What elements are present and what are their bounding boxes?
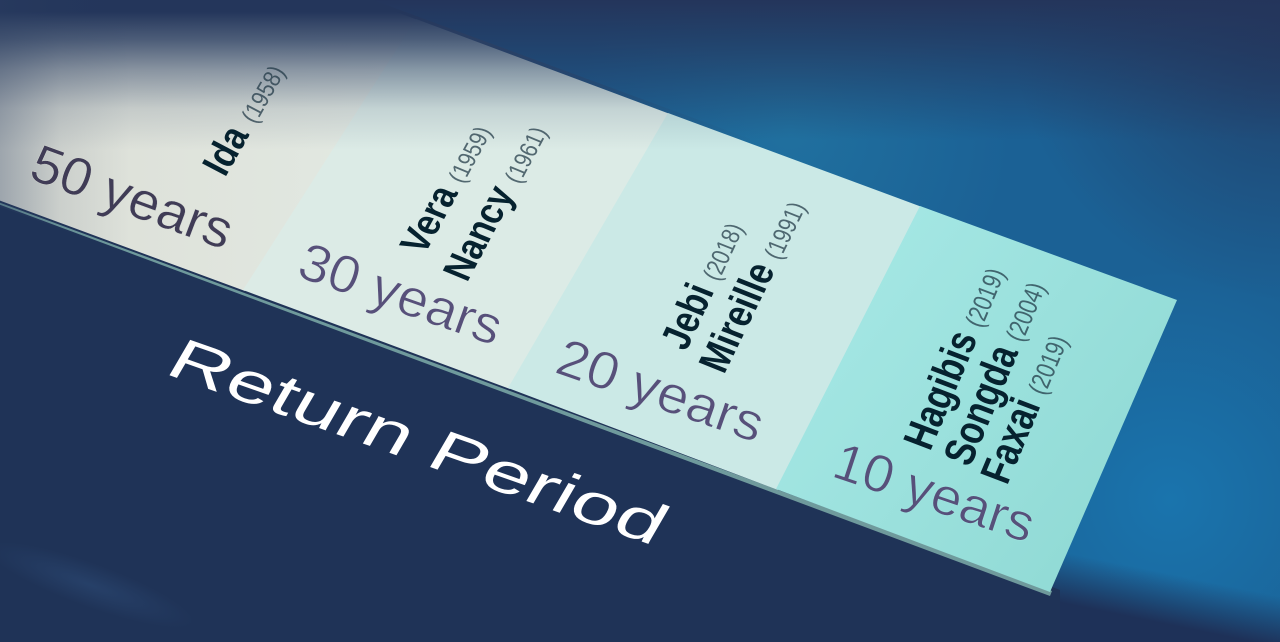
name: Ida: Ida (1958) (193, 54, 293, 182)
name: Songda: Songda (2004) (935, 273, 1055, 472)
panel: 20 years (508, 113, 922, 490)
name: Hagibis: Hagibis (2019) (895, 259, 1015, 456)
name: Faxai: Faxai (2019) (972, 327, 1078, 490)
left fade (0, 34, 98, 236)
heading: Return Period: Return Period (156, 327, 680, 557)
name: Vera: Vera (1959) (390, 117, 500, 259)
panel: 50 years (0, 0, 418, 291)
label: 20 years: 20 years (549, 327, 772, 454)
label: 30 years: 30 years (291, 232, 510, 357)
band lower edge (0, 199, 1052, 596)
top fade (0, 0, 728, 136)
name: Mireille: Mireille (1991) (691, 193, 816, 379)
panel: 30 years (243, 19, 670, 389)
label: 50 years: 50 years (23, 134, 241, 261)
label: 10 years: 10 years (826, 432, 1042, 554)
name: Jebi: Jebi (2018) (651, 214, 752, 355)
name: Nancy: Nancy (1961) (434, 118, 556, 286)
panel: 10 years (776, 206, 1177, 592)
